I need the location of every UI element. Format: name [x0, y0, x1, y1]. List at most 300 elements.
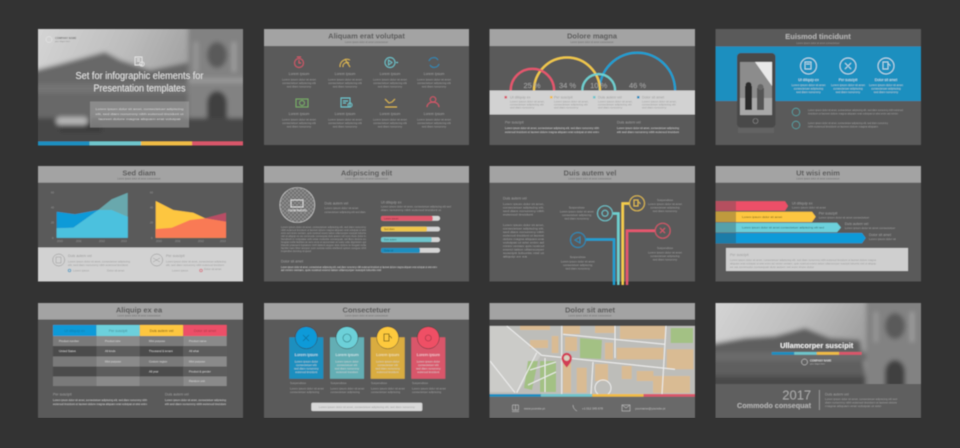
table: Mini purpose: [105, 360, 121, 364]
node captions: [560, 198, 682, 270]
left area chart: [51, 190, 128, 243]
body paragraph: facilisi nam liber tempor cum soluta nobis eleifend option congue nihil: [281, 246, 366, 250]
legend: sed diam nonummy: [598, 106, 623, 110]
icon captions: Lorem ipsum dolor sit amet: [417, 118, 451, 122]
contact row: +1 012 345 678: [582, 406, 603, 410]
icon: user: [427, 97, 439, 107]
icon captions: sed diam nonummy: [333, 84, 358, 88]
card captions: consectetuer adipiscing: [290, 390, 320, 394]
header: Dolor sit amet: [565, 306, 616, 314]
icon: line chart: [385, 99, 397, 107]
node captions: sed diam nonummy: [653, 209, 678, 213]
card captions: consectetuer adipiscing: [371, 390, 401, 394]
notes with check icons: [792, 108, 903, 129]
feature captions: Lorem ipsum dolor sit amet: [869, 83, 903, 87]
intro text: [324, 202, 366, 214]
node captions: Suspendisse: [657, 198, 673, 202]
icon captions: sed diam nonummy: [378, 124, 403, 128]
contact row: yourname@yoursite.pt: [635, 406, 665, 410]
progress bars: [381, 216, 440, 253]
slide: cover with infographic title: [37, 28, 244, 146]
icon captions: Lorem ipsum dolor sit amet: [373, 118, 407, 122]
icon captions: Lorem ipsum dolor sit amet: [328, 78, 362, 82]
left column text: sed diam nonummy nibh: [503, 209, 545, 213]
card: red: sed diam nonummy: [416, 366, 441, 370]
icon captions: consectetuer adipiscing elit: [373, 121, 407, 125]
header: Sed diam: [122, 168, 156, 178]
icon captions: Lorem ipsum: [289, 72, 309, 76]
table: All year: [149, 370, 158, 374]
percent labels: 25 %: [523, 81, 541, 90]
card: blue: Lorem ipsum: [295, 352, 319, 357]
percent labels: [523, 81, 646, 90]
table: United States: [59, 349, 76, 353]
card captions: [290, 381, 446, 394]
node captions: consectetuer adipiscing: [562, 213, 592, 217]
header: Aliquam erat volutpat: [328, 32, 405, 40]
legend: Dolor sit amet: [642, 96, 664, 100]
legend: sed diam nonummy: [510, 106, 535, 110]
feature captions: Lorem ipsum dolor sit amet: [831, 83, 865, 87]
icon captions: Lorem ipsum: [289, 112, 309, 116]
map pin: [562, 353, 572, 368]
closing photo: [714, 302, 922, 384]
card: yellow: sed diam nonummy: [375, 366, 401, 370]
arrow captions: Ut diliquip ex: [792, 202, 813, 206]
header: Lorem ipsum dolor sit amet consectetuer: [796, 178, 840, 180]
card: red: Lorem ipsum: [417, 352, 441, 357]
header: [38, 166, 243, 183]
header: [490, 303, 695, 320]
card captions: Suspendisse: [371, 381, 387, 385]
header: Lorem ipsum dolor sit amet consectetuer: [117, 314, 161, 318]
header: Duis autem vel: [564, 168, 616, 178]
light band: [38, 248, 243, 282]
feature captions: Dolor sit amet: [875, 78, 897, 82]
header: [490, 166, 695, 183]
bottom notes: Lorem ipsum dolor sit amet, consectetuer adipiscing elit, sed diam nonummy nibh: [53, 398, 147, 402]
year: 2017: [782, 388, 811, 402]
card captions: consectetuer adipiscing: [412, 390, 442, 394]
bottom notes: Lorem ipsum dolor sit amet, consectetuer adipiscing: [165, 398, 226, 402]
contact row: www.yoursite.pt: [524, 406, 545, 410]
node captions: consectetuer adipiscing: [563, 263, 593, 267]
icon captions: Lorem ipsum: [335, 112, 355, 116]
table: Per suscipit: [109, 329, 127, 333]
icon captions: Lorem ipsum: [335, 72, 355, 76]
legend: sed diam nonummy: [554, 106, 579, 110]
icon captions: Lorem ipsum dolor sit amet: [282, 78, 316, 82]
table: All kinds: [105, 349, 116, 353]
left column text: euismod tincidunt ut laoreet: [503, 234, 544, 238]
feature captions: consectetuer adipiscing: [794, 86, 824, 90]
card: blue: Lorem ipsum dolor: [295, 360, 318, 364]
right note: Per suscipit: [166, 254, 185, 258]
table: Product name: [189, 339, 207, 343]
arrow captions: Lorem ipsum dolor sit amet: [792, 206, 826, 210]
legend: Per suscipit: [554, 96, 573, 100]
left area chart: 40: [51, 206, 54, 210]
node captions: sed diam nonummy: [565, 266, 591, 270]
table: Mini purpose: [149, 339, 165, 343]
right area chart: 2012: [198, 239, 204, 243]
legend: sed diam nonummy: [642, 106, 667, 110]
left column text: [503, 196, 545, 258]
node captions: consectetuer adipiscing: [650, 254, 680, 258]
progress bars: Dolor sit: [384, 249, 393, 252]
legend: Lorem ipsum dolor sit amet,: [510, 100, 545, 104]
table: Dolor sit amet: [194, 329, 216, 333]
table: Custom region: [149, 360, 168, 364]
body paragraph: enim ad minim veniam, quis nostrud exerci tation ullamcorper suscipit lobortis: [281, 231, 367, 235]
icon captions: Lorem ipsum: [424, 72, 444, 76]
logo: [46, 36, 77, 43]
logo: COMPANY NAME: [55, 36, 77, 40]
arrow bars: Lorem ipsum dolor sit amet: [742, 215, 782, 219]
left column text: dolore magna aliquam erat: [503, 237, 544, 241]
node captions: Suspendisse: [569, 206, 585, 210]
left column text: sed diam nonummy nibh: [503, 230, 545, 234]
left column text: Duis autem vel: [503, 196, 527, 200]
slide: table: [38, 303, 243, 418]
cover caption box: elit, sed diam nonummy nibh euismod tincidunt ut: [96, 112, 184, 116]
bottom notes: [53, 392, 226, 406]
cover title: Set for infographic elements for: [76, 71, 204, 82]
blue band: [716, 46, 921, 101]
left area chart: 2011: [76, 239, 82, 243]
table: Product & gender: [189, 370, 211, 374]
body paragraph: Lorem ipsum dolor sit amet, consectetuer adipiscing elit, sed diam nonummy nibh euismod tincidunt ut laoreet dolore magna aliquam erat volutpat ut wisi enim: [281, 265, 438, 269]
header: Consectetuer: [343, 306, 391, 314]
right note: elit, sed diam nonummy nibh euismod tincidunt: [166, 263, 224, 267]
header: Lorem ipsum dolor sit amet consectetuer: [345, 314, 388, 318]
closing note: diam nonummy nibh euismod tincidunt ut laoreet dolore: [825, 400, 897, 404]
legend: Ut diliquip ex: [510, 96, 531, 100]
progress bars: Sed diam: [384, 228, 395, 231]
cover caption box: Lorem ipsum dolor sit amet, consectetuer adipiscing: [96, 107, 184, 111]
note box: Lorem ipsum dolor sit amet, consectetuer adipiscing elit, sed diam nonummy nibh euismod tincidunt ut laoreet dolore magna: [730, 258, 876, 262]
light band: [490, 90, 695, 114]
node captions: Lorem ipsum dolor sit amet: [648, 250, 682, 254]
feature captions: consectetuer adipiscing: [833, 86, 863, 90]
card: teal: euismod tincidunt: [336, 370, 358, 374]
closing title: Ullamcorper suscipit: [780, 341, 854, 350]
legend: Lorem ipsum dolor sit amet,: [554, 100, 589, 104]
table: Thousand & tenant: [149, 349, 173, 353]
note box: Per suscipit: [730, 253, 749, 257]
icon: gauge: [340, 59, 350, 67]
notes with check icons: Lorem ipsum dolor sit amet, consectetuer adipiscing elit, sed diam nonummy nibh euismod: [808, 108, 903, 112]
legend: consectetuer adipiscing elit: [510, 102, 544, 106]
note box: [726, 248, 908, 271]
icon captions: sed diam nonummy: [422, 84, 447, 88]
icon captions: sed diam nonummy: [378, 84, 403, 88]
intro text: consectetuer adipiscing elit sed diam: [324, 210, 366, 214]
card: teal: consectetuer elit: [337, 363, 357, 367]
arrow captions: Duis autem vel: [845, 222, 869, 226]
bottom notes: euismod tincidunt ut laoreet dolore magna aliquam erat volutpat ut wisi enim: [53, 402, 148, 406]
table: Product number: [59, 339, 79, 343]
cover photo: [37, 28, 244, 142]
body paragraph: feugiat nulla facilisis at vero eros et accumsan et iusto odio dignissim qui: [281, 240, 366, 244]
left column text: volutpat ut wisi enim ad: [503, 240, 545, 244]
right area chart: 20: [150, 220, 153, 224]
card captions: consectetuer adipiscing: [330, 390, 360, 394]
percent labels: 46 %: [629, 81, 646, 90]
card captions: Suspendisse: [330, 381, 347, 385]
body paragraph: [281, 225, 438, 272]
header: Lorem ipsum dolor sit amet consectetuer: [568, 178, 612, 180]
icon: play: [385, 58, 398, 68]
arrow captions: Dolor sit amet: [869, 233, 891, 237]
skill text: diam nonummy nibh euismod tincidunt ut: [381, 208, 441, 212]
slide: arrow bars: [716, 166, 921, 282]
left column text: euismod tincidunt: [503, 212, 533, 216]
closing note: [825, 392, 897, 408]
arrow captions: Lorem ipsum dolor sit: [869, 237, 896, 241]
header: Lorem ipsum dolor sit amet consectetuer: [117, 178, 161, 180]
icon captions: sed diam nonummy: [333, 124, 358, 128]
right area chart: 2010: [156, 239, 162, 243]
header: Lorem ipsum dolor sit amet consectetuer: [345, 178, 388, 180]
icon captions: Lorem ipsum dolor sit amet: [373, 78, 407, 82]
icon: chart page: [135, 57, 144, 66]
divider: [818, 390, 821, 410]
card: red: consectetuer elit: [418, 363, 439, 367]
slide: icon grid: [264, 29, 469, 145]
card: blue: sed diam nonummy: [294, 366, 319, 370]
intro text: Duis autem vel: [324, 202, 348, 206]
contact row: [512, 405, 665, 412]
left column text: consectetuer adipiscing elit,: [503, 226, 544, 230]
intro text: Lorem ipsum dolor sit amet: [324, 206, 358, 210]
right note: Dolor sit amet: [204, 267, 221, 271]
legend: [504, 96, 677, 110]
node captions: consectetuer adipiscing: [650, 206, 680, 210]
bottom notes: Duis autem vel: [165, 392, 189, 396]
card captions: Lorem ipsum dolor sit amet: [290, 386, 324, 390]
slide: progress bars: [264, 166, 469, 282]
header: Lorem ipsum dolor sit amet consectetuer: [570, 41, 614, 44]
left area chart: 2010: [57, 239, 63, 243]
feature captions: sed diam nonummy: [796, 90, 821, 94]
left note: Lorem ipsum dolor sit amet, consectetuer adipiscing: [68, 260, 130, 264]
card: blue: euismod tincidunt: [295, 370, 317, 374]
slide: area charts: [38, 166, 243, 282]
legend: consectetuer adipiscing elit: [554, 102, 588, 106]
left note: elit, sed diam nonummy nibh euismod tincidunt: [68, 263, 128, 267]
body paragraph: nibh euismod tincidunt ut laoreet dolore magna aliquam erat volutpat ut wisi: [281, 228, 366, 232]
feature circles: [800, 58, 894, 74]
card: red: [411, 327, 445, 379]
header: [264, 166, 469, 183]
header: Aliquip ex ea: [116, 306, 163, 314]
body paragraph: nisl ut aliquip ex ea commodo consequat duis autem vel eum iriure dolor in: [281, 234, 366, 238]
percent labels: 10 %: [590, 81, 608, 90]
card captions: Lorem ipsum dolor sit amet: [330, 386, 364, 390]
note pill: [311, 403, 422, 411]
node captions: Lorem ipsum dolor sit amet: [560, 210, 594, 214]
card captions: Suspendisse: [412, 381, 428, 385]
legend: consectetuer adipiscing elit: [642, 102, 676, 106]
right note: Lorem ipsum: [172, 268, 189, 272]
icon captions: Lorem ipsum dolor sit amet: [328, 118, 362, 122]
feature captions: Ut diliquip ex: [798, 78, 819, 82]
slide: arc percentages: [490, 29, 695, 145]
color strip: [772, 352, 862, 355]
left column text: aliquip ex ea: [503, 254, 528, 258]
left column text: minim veniam quis nostrud: [503, 244, 545, 248]
connector lines: [586, 204, 655, 285]
note pill: Lorem ipsum dolor sit amet, consectetuer adipiscing elit, sed diam nonummy: [319, 405, 415, 409]
right area chart: 60: [150, 190, 153, 194]
color strip: [38, 142, 243, 146]
left area chart: 20: [51, 220, 54, 224]
icon captions: consectetuer adipiscing elit: [373, 81, 407, 85]
table: Ut diliquip ex: [64, 329, 85, 333]
feature captions: Lorem ipsum dolor sit amet: [792, 83, 826, 87]
arrow captions: Per suscipit: [819, 212, 837, 216]
card: yellow: euismod tincidunt: [377, 370, 399, 374]
map: [490, 326, 695, 396]
cover title: [76, 71, 204, 94]
photo placeholder circle: YOUR PHOTO: [288, 208, 307, 212]
left area chart: 0: [52, 236, 54, 240]
card captions: Lorem ipsum dolor sit amet: [412, 386, 446, 390]
card: red: Lorem ipsum dolor: [417, 360, 440, 364]
left area chart: 2013: [121, 239, 127, 243]
card: yellow: consectetuer elit: [378, 363, 398, 367]
bottom notes: elit sed diam nonummy nibh euismod tincidunt: [165, 402, 226, 406]
card captions: Suspendisse: [290, 381, 306, 385]
slide: colored cards: [264, 303, 469, 418]
progress bars: Lorem ipsum: [384, 217, 398, 220]
right area chart: 2011: [175, 239, 181, 243]
icon captions: Lorem ipsum dolor sit amet: [417, 78, 451, 82]
card: teal: Lorem ipsum: [335, 352, 359, 357]
notes with check icons: tincidunt ut laoreet dolore magna aliquam erat volutpat ut wisi enim ad minim: [808, 112, 899, 116]
legend: Lorem ipsum dolor sit amet,: [642, 100, 677, 104]
cover caption box: [90, 102, 189, 128]
card captions: Lorem ipsum dolor sit amet: [371, 386, 405, 390]
logo: your slogan here: [55, 41, 71, 43]
icon captions: sed diam nonummy: [287, 124, 312, 128]
arc chart: [511, 53, 675, 90]
node captions: Suspendisse: [570, 255, 586, 259]
cover title: Presentation templates: [94, 84, 186, 94]
legend: Duis autem vel: [598, 96, 622, 100]
right area chart: 2013: [220, 239, 226, 243]
header: [716, 166, 921, 183]
left column text: Lorem ipsum dolor sit amet,: [503, 223, 544, 227]
bottom notes: Lorem ipsum dolor sit amet, consectetuer adipiscing elit, sed diam nonummy nibh: [505, 126, 599, 130]
icon: refresh: [429, 58, 439, 67]
phone: [737, 53, 776, 133]
photo placeholder circle: [280, 188, 315, 222]
header: Adipiscing elit: [341, 168, 393, 178]
bottom notes: Lorem ipsum dolor sit amet, consectetuer adipiscing: [617, 126, 679, 130]
node captions: sed diam nonummy: [653, 258, 678, 262]
card: yellow: [371, 327, 405, 379]
icon captions: Lorem ipsum: [380, 72, 400, 76]
right area chart: [150, 190, 226, 243]
body paragraph: imperdiet doming id quod: [281, 249, 311, 253]
icon captions: consectetuer adipiscing elit: [417, 81, 451, 85]
notes with check icons: nibh euismod tincidunt ut laoreet dolore magna aliquam: [808, 124, 879, 128]
header: [785, 32, 851, 45]
color strip: [490, 394, 695, 397]
right area chart: 40: [150, 206, 153, 210]
closing subtitle: Commodo consequat: [737, 401, 812, 410]
left note: Lorem ipsum: [73, 268, 90, 272]
right note: [151, 254, 226, 272]
arrow captions: Lorem ipsum dolor sit amet consectetuer: [845, 226, 895, 230]
legend: Lorem ipsum dolor sit amet,: [598, 100, 633, 104]
header: [264, 303, 469, 320]
bottom notes: [505, 120, 679, 134]
table: Mini purpose: [189, 360, 205, 364]
closing note: magna aliquam erat volutpat ut wisi: [825, 404, 881, 408]
left note: Duis autem vel: [68, 254, 92, 258]
right note: Lorem ipsum dolor sit amet, consectetuer adipiscing: [166, 260, 226, 264]
notes with check icons: Lorem ipsum dolor sit amet, consectetuer adipiscing elit, sed diam nonummy: [808, 121, 889, 125]
note box: ex ea commodo consequat duis autem vel eum iriure dolor: [730, 265, 814, 269]
icon captions: sed diam nonummy: [422, 124, 447, 128]
feature captions: [792, 78, 903, 94]
skill text: Lorem ipsum dolor sit amet, consectetuer adipiscing elit sed: [381, 204, 451, 208]
left column text: suscipit lobortis nisl ut: [503, 251, 544, 255]
slide: phone mockup: [716, 29, 921, 145]
header: Lorem ipsum dolor sit amet consectetuer: [568, 314, 612, 318]
right area chart: 0: [151, 236, 153, 240]
left column text: exerci tation ullamcorper: [503, 248, 544, 252]
body paragraph: ad minim veniam, quis nostrud exerci tation ullamcorper suscipit lobortis nisl: [281, 268, 381, 272]
card: red: euismod tincidunt: [417, 370, 439, 374]
node captions: Suspendisse: [657, 246, 673, 250]
node captions: sed diam nonummy: [564, 216, 590, 220]
header: [490, 29, 695, 46]
header: [264, 29, 469, 46]
table: Duis autem vel: [150, 329, 174, 333]
table: [53, 325, 227, 386]
feature captions: Per suscipit: [839, 78, 857, 82]
header: Euismod tincidunt: [785, 32, 851, 41]
bottom notes: Per suscipit: [53, 392, 72, 396]
icon captions: [282, 72, 451, 128]
icon captions: consectetuer adipiscing elit: [282, 121, 316, 125]
header: Lorem ipsum dolor sit amet consectetuer: [345, 41, 388, 44]
icon captions: consectetuer adipiscing elit: [328, 81, 362, 85]
skill text: [381, 200, 451, 212]
card: teal: [330, 327, 364, 379]
progress bars: Duis autem: [384, 239, 397, 242]
card: teal: Lorem ipsum dolor: [335, 360, 359, 364]
closing note: Lorem ipsum dolor sit amet, consectetuer adipiscing elit sed: [825, 397, 897, 401]
logo: COMPANY NAME: [810, 358, 832, 362]
left column text: consectetuer adipiscing elit,: [503, 206, 544, 210]
feature captions: consectetuer adipiscing: [871, 86, 901, 90]
node captions: Lorem ipsum dolor sit amet: [561, 260, 595, 264]
card: blue: [289, 327, 323, 379]
slide: closing: [714, 302, 922, 418]
legend: consectetuer adipiscing elit: [598, 102, 632, 106]
header: Dolore magna: [567, 32, 618, 40]
header: Lorem ipsum dolor sit amet consectetuer: [796, 42, 840, 45]
bottom notes: euismod tincidunt ut laoreet dolore magna aliquam erat volutpat ut wisi enim: [505, 130, 600, 134]
left area chart: 60: [51, 190, 54, 194]
logo: your slogan here: [810, 364, 826, 366]
icon captions: consectetuer adipiscing elit: [328, 121, 362, 125]
